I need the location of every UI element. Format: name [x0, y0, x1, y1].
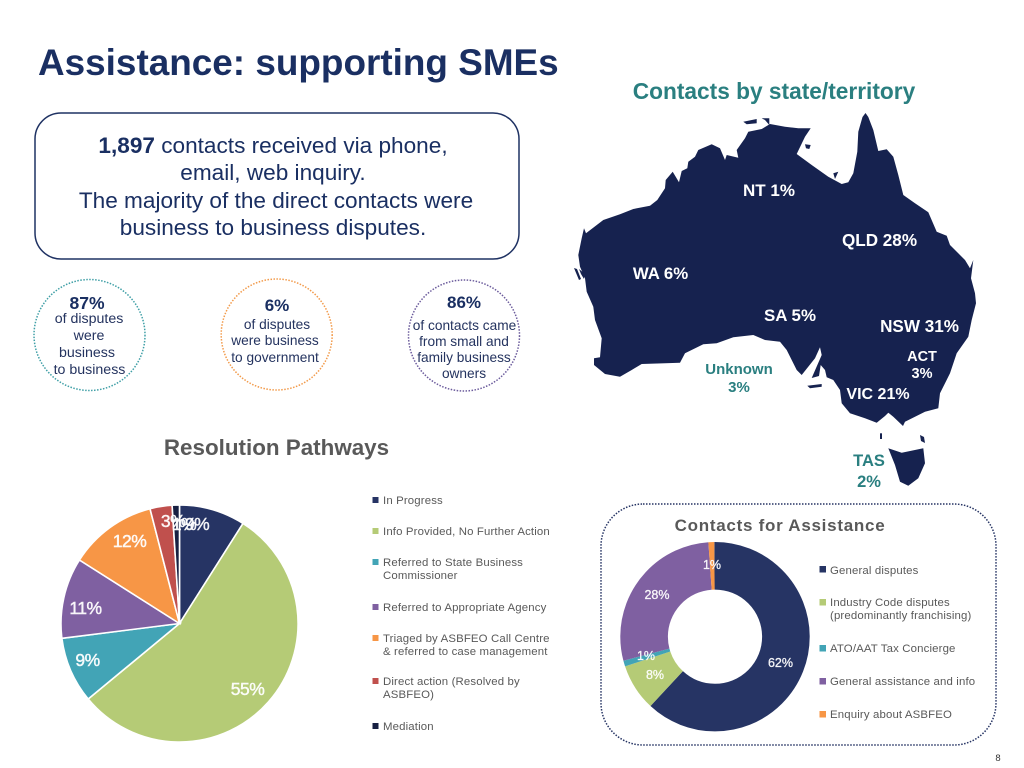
legend: resolution pathways: Triaged by ASBFEO Call Centre [383, 633, 550, 645]
stat circle: 6% business to government: of disputes [244, 317, 310, 332]
stat circle: 86% small and family business [408, 280, 520, 391]
pie chart: resolution pathways: 12% [113, 531, 146, 551]
stat circle: 87% business to business: were [73, 328, 104, 344]
pie chart: resolution pathways [61, 505, 298, 742]
pie chart: resolution pathways: 3% [161, 511, 185, 531]
map label: ACT: 3% [912, 366, 933, 382]
stat circle: 86% small and family business: from small and [419, 334, 509, 349]
map label: QLD: QLD 28% [842, 231, 917, 250]
map label: ACT: ACT [907, 349, 937, 365]
stat circle: 86% small and family business: 86% [447, 293, 481, 312]
stat circle: 86% small and family business: of contacts came [413, 318, 516, 333]
panel heading: Contacts for Assistance [675, 516, 885, 535]
legend: resolution pathways: Referred to State Business [383, 557, 523, 569]
stat circle: 87% business to business: of disputes [55, 311, 123, 327]
legend: contacts for assistance: (predominantly franchising) [830, 610, 971, 622]
legend: resolution pathways: Mediation [383, 721, 434, 733]
panel: contacts for assistance [601, 504, 996, 745]
legend: resolution pathways: & referred to case management [383, 646, 548, 658]
callout: contacts summary: 1,897 contacts received via phone, [98, 133, 448, 158]
map label: NT: NT 1% [743, 181, 795, 200]
stat circle: 6% business to government: 6% [265, 296, 289, 315]
legend: resolution pathways: Direct action (Resolved by [383, 676, 520, 688]
legend: resolution pathways: Referred to Appropriate Agency [383, 602, 547, 614]
legend: resolution pathways: Commissioner [383, 570, 458, 582]
callout: contacts summary [35, 113, 519, 259]
callout: contacts summary: email, web inquiry. [180, 160, 366, 185]
legend: contacts for assistance: Enquiry about ASBFEO [830, 709, 952, 721]
stat circle: 86% small and family business: family business [417, 350, 511, 365]
legend: resolution pathways: ASBFEO) [383, 689, 434, 701]
donut labels: 28% [644, 588, 670, 602]
legend: resolution pathways: Info Provided, No Further Action [383, 526, 550, 538]
legend: contacts for assistance [820, 565, 975, 721]
donut chart [644, 566, 786, 708]
pie chart: resolution pathways: 9% [185, 514, 209, 534]
callout: contacts summary: The majority of the direct contacts were [79, 188, 473, 213]
stat circle: 86% small and family business: owners [442, 366, 486, 381]
title: Assistance: supporting SMEs [38, 42, 559, 83]
legend: contacts for assistance: General assistance and info [830, 676, 975, 688]
stat circle: 6% business to government: to government [231, 350, 319, 365]
donut labels: 62% [768, 656, 793, 670]
donut labels [637, 558, 793, 682]
map label: VIC: VIC 21% [846, 386, 910, 403]
map of Australia [574, 113, 976, 486]
map label: TAS: 2% [857, 473, 881, 491]
page number: 8 [995, 753, 1001, 764]
legend: resolution pathways [372, 495, 550, 733]
legend: contacts for assistance: ATO/AAT Tax Concierge [830, 643, 956, 655]
map label: Unknown: Unknown [705, 361, 773, 378]
stat circle: 6% business to government [221, 279, 332, 390]
map label: TAS: TAS [853, 452, 885, 470]
stat circle: 6% business to government: were business [230, 333, 319, 348]
pie chart: resolution pathways: 11% [69, 598, 102, 618]
legend: resolution pathways: In Progress [383, 495, 443, 507]
stat circle: 87% business to business [34, 280, 145, 390]
stat circle: 87% business to business: to business [54, 362, 125, 378]
map label: WA: WA 6% [633, 264, 688, 283]
legend: contacts for assistance: General disputes [830, 565, 919, 577]
pie chart: resolution pathways: 9% [75, 650, 100, 670]
donut labels: 1% [637, 649, 655, 663]
heading: resolution pathways: Resolution Pathways [164, 435, 389, 460]
map label: NSW: NSW 31% [880, 317, 959, 336]
stat circle: 87% business to business: 87% [69, 293, 105, 313]
donut labels: 1% [703, 558, 721, 572]
donut labels: 8% [646, 668, 664, 682]
stat circle: 87% business to business: business [59, 345, 115, 361]
callout: contacts summary: business to business disputes. [120, 215, 426, 240]
legend: contacts for assistance: Industry Code disputes [830, 597, 950, 609]
map label: SA: SA 5% [764, 306, 816, 325]
pie chart: resolution pathways: 1% [172, 514, 196, 534]
map label: Unknown: 3% [728, 379, 750, 396]
pie chart: resolution pathways: 55% [231, 679, 264, 699]
heading: contacts by state: Contacts by state/territory [633, 78, 916, 104]
